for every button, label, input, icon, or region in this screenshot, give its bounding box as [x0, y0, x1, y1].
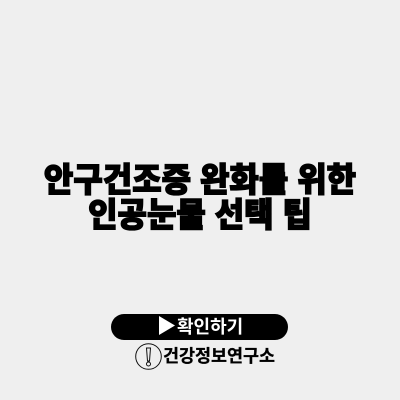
brand — [135, 343, 275, 370]
title line 1: 안구건조증 완화를 위한 — [44, 161, 356, 199]
button label: 확인하기 — [177, 317, 243, 337]
title line 2: 인공눈물 선택 팁 — [88, 196, 312, 234]
brand name: 건강정보연구소 — [163, 346, 275, 366]
title — [44, 161, 356, 234]
icon: exclamation circle — [135, 343, 162, 370]
button icon: play triangle — [159, 316, 175, 335]
button: confirm — [111, 314, 288, 340]
